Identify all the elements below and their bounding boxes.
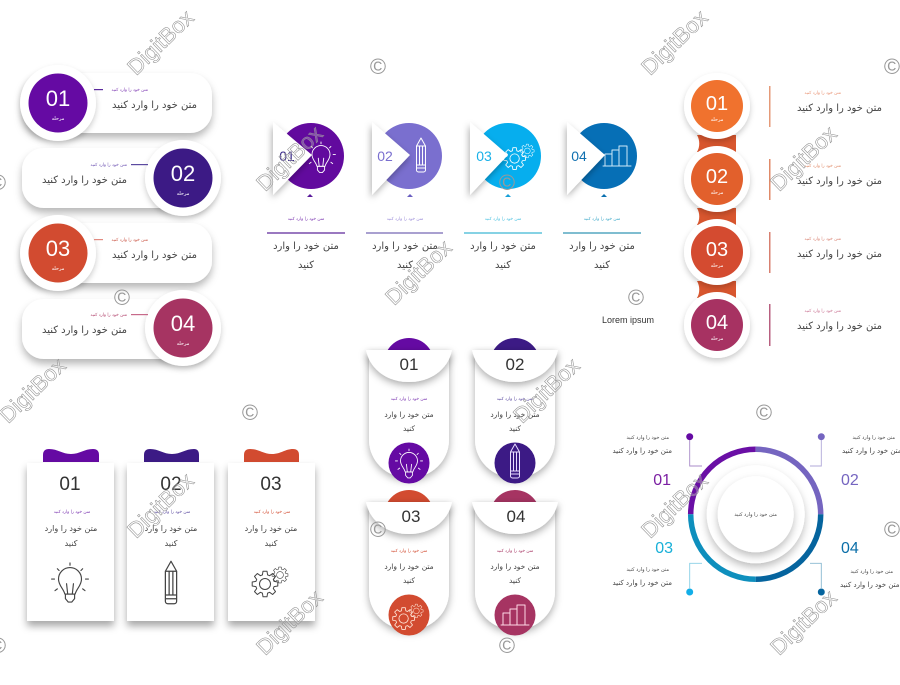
- panel: right vertical timeline: [684, 73, 882, 358]
- panel: left stacked pills: [20, 65, 221, 366]
- shield card 01: [366, 338, 452, 484]
- tab card 02: [127, 449, 214, 621]
- arrow step 02: کنید: [397, 260, 413, 271]
- step 01 pill: مرحله: [52, 116, 65, 122]
- watermarks: DigitBox: [122, 468, 198, 543]
- tab card 02: متن خود را وارد کنید: [154, 509, 190, 515]
- shield card 02: 02: [506, 355, 524, 374]
- callout 02: متن خود را وارد کنید: [852, 435, 895, 441]
- watermarks: ©: [114, 285, 130, 310]
- arrow step 01: متن خود را وارد: [273, 241, 339, 252]
- step 01 pill: متن خود را وارد کنید: [112, 100, 197, 111]
- shield card 03: متن خود را وارد کنید: [391, 548, 427, 554]
- arrow step 03: [464, 122, 542, 271]
- watermarks: DigitBox: [636, 468, 712, 543]
- shield card 01: کنید: [403, 424, 415, 433]
- shield card 03: کنید: [403, 576, 415, 585]
- timeline step 01: [684, 73, 882, 139]
- watermarks: ©: [756, 400, 772, 425]
- timeline step 02: متن خود را وارد کنید: [804, 163, 841, 169]
- panel: circular ring diagram: [612, 433, 900, 596]
- shield card 01: متن خود را وارد کنید: [391, 396, 427, 402]
- arrow step 03: 03: [476, 148, 492, 164]
- callout 03: متن خود را وارد کنید: [612, 579, 672, 587]
- timeline step 03: متن خود را وارد کنید: [804, 236, 841, 242]
- step 02 pill: [22, 140, 221, 216]
- timeline step 02: [684, 146, 882, 212]
- tab card 01: متن خود را وارد: [45, 524, 97, 533]
- watermarks: ©: [499, 170, 515, 195]
- shield card 04: متن خود را وارد کنید: [497, 548, 533, 554]
- arrow step 04: کنید: [594, 260, 610, 271]
- watermarks: ©: [370, 517, 386, 542]
- watermarks: DigitBox: [765, 121, 841, 196]
- shield card 03: 03: [402, 507, 420, 526]
- panel: shield cards grid: [366, 338, 558, 636]
- watermarks: DigitBox: [122, 5, 198, 80]
- watermarks: ©: [884, 54, 900, 79]
- tab card 03: [228, 449, 315, 621]
- step 02 pill: متن خود را وارد کنید: [90, 162, 127, 168]
- shield card 04: [472, 490, 558, 636]
- tab card 03: متن خود را وارد کنید: [254, 509, 290, 515]
- callout 04: 04: [841, 540, 859, 557]
- step 03 pill: [20, 215, 212, 291]
- timeline step 04: 04: [706, 312, 728, 334]
- step 02 pill: مرحله: [177, 191, 190, 197]
- arrow step 03: کنید: [495, 260, 511, 271]
- shield card 04: متن خود را وارد: [490, 562, 540, 571]
- shield card 01: متن خود را وارد: [384, 410, 434, 419]
- centre discs: [707, 465, 805, 563]
- arrow step 04: متن خود را وارد: [569, 241, 635, 252]
- timeline step 04: [684, 292, 882, 358]
- callout 01: 01: [653, 472, 671, 489]
- callout 01: [612, 433, 702, 489]
- timeline step 03: متن خود را وارد کنید: [797, 249, 882, 260]
- timeline step 04: متن خود را وارد کنید: [804, 308, 841, 314]
- timeline step 04: متن خود را وارد کنید: [797, 321, 882, 332]
- tab card 02: 02: [160, 474, 182, 495]
- tab card 03: کنید: [265, 539, 278, 548]
- arrow step 04: متن خود را وارد کنید: [584, 216, 620, 222]
- ring segments: [691, 449, 821, 579]
- shield card 02: متن خود را وارد: [490, 410, 540, 419]
- step 04 pill: متن خود را وارد کنید: [42, 325, 127, 336]
- timeline step 02: 02: [706, 166, 728, 188]
- panel: bottom-left tabbed cards: [27, 449, 315, 621]
- step 04 pill: 04: [171, 311, 195, 336]
- arrow step 01: کنید: [298, 260, 314, 271]
- tab card 02: متن خود را وارد: [145, 524, 197, 533]
- arrow step 02: 02: [377, 148, 393, 164]
- tab card 01: کنید: [65, 539, 78, 548]
- watermarks: ©: [628, 285, 644, 310]
- shield card 03: متن خود را وارد: [384, 562, 434, 571]
- shield card 03: [366, 490, 452, 636]
- tab card 03: متن خود را وارد: [245, 524, 297, 533]
- watermarks: DigitBox: [251, 121, 327, 196]
- arrow step 01: متن خود را وارد کنید: [288, 216, 324, 222]
- step 04 pill: مرحله: [177, 341, 190, 347]
- shield card 04: کنید: [509, 576, 521, 585]
- watermarks: ©: [242, 400, 258, 425]
- shield card 04: 04: [507, 507, 525, 526]
- panel: arrow circles row: [267, 122, 654, 325]
- callout 03: متن خود را وارد کنید: [626, 567, 669, 573]
- arrow step 03: متن خود را وارد: [470, 241, 536, 252]
- tab card 01: 01: [59, 474, 81, 495]
- callout 04: متن خود را وارد کنید: [850, 569, 893, 575]
- timeline step 04: مرحله: [711, 336, 724, 342]
- step 02 pill: 02: [171, 161, 195, 186]
- watermarks: DigitBox: [251, 585, 327, 660]
- arrow step 02: متن خود را وارد کنید: [387, 216, 423, 222]
- watermarks: ©: [884, 517, 900, 542]
- shield card 02: [472, 338, 558, 484]
- timeline step 02: مرحله: [711, 190, 724, 196]
- arrow step 04: [563, 122, 641, 271]
- shield card 01: 01: [400, 355, 418, 374]
- tab card 01: متن خود را وارد کنید: [54, 509, 90, 515]
- step 01 pill: متن خود را وارد کنید: [111, 87, 148, 93]
- arrow step 02: [366, 122, 443, 271]
- watermarks: DigitBox: [508, 353, 584, 428]
- caption: lorem ipsum: Lorem ipsum: [602, 315, 654, 325]
- shield card 02: کنید: [509, 424, 521, 433]
- timeline step 02: متن خود را وارد کنید: [797, 176, 882, 187]
- callout 01: متن خود را وارد کنید: [612, 447, 672, 455]
- callout 03: 03: [655, 540, 673, 557]
- step 03 pill: متن خود را وارد کنید: [112, 250, 197, 261]
- arrow step 01: [267, 122, 345, 271]
- step 02 pill: متن خود را وارد کنید: [42, 175, 127, 186]
- tab card 02: کنید: [165, 539, 178, 548]
- step 03 pill: 03: [46, 236, 70, 261]
- step 03 pill: متن خود را وارد کنید: [111, 237, 148, 243]
- arrow step 03: متن خود را وارد کنید: [485, 216, 521, 222]
- callout 01: متن خود را وارد کنید: [626, 435, 669, 441]
- step 01 pill: 01: [46, 86, 70, 111]
- shield card 02: متن خود را وارد کنید: [497, 396, 533, 402]
- timeline step 03: [684, 219, 882, 285]
- step 04 pill: [22, 290, 221, 366]
- timeline step 01: متن خود را وارد کنید: [797, 103, 882, 114]
- arrow step 01: 01: [279, 148, 295, 164]
- watermarks: ©: [370, 54, 386, 79]
- watermarks: DigitBox: [765, 585, 841, 660]
- arrow step 04: 04: [571, 148, 587, 164]
- tab card 03: 03: [260, 474, 282, 495]
- callout 03: [612, 540, 702, 596]
- step 04 pill: متن خود را وارد کنید: [90, 312, 127, 318]
- arrow step 02: متن خود را وارد: [372, 241, 438, 252]
- watermarks: DigitBox: [636, 5, 712, 80]
- callout 02: متن خود را وارد کنید: [842, 447, 900, 455]
- tab card 01: [27, 449, 114, 621]
- timeline step 03: 03: [706, 239, 728, 261]
- centre discs: متن خود را وارد کنید: [734, 512, 777, 518]
- timeline step 01: مرحله: [711, 117, 724, 123]
- step 01 pill: [20, 65, 212, 141]
- timeline step 01: 01: [706, 93, 728, 115]
- callout 02: 02: [841, 472, 859, 489]
- watermarks: DigitBox: [380, 235, 456, 310]
- callout 04: [810, 540, 900, 596]
- step 03 pill: مرحله: [52, 266, 65, 272]
- callout 02: [810, 433, 900, 489]
- timeline step 03: مرحله: [711, 263, 724, 269]
- callout 04: متن خود را وارد کنید: [840, 581, 900, 589]
- timeline step 01: متن خود را وارد کنید: [804, 90, 841, 96]
- watermarks: ©: [499, 633, 515, 658]
- connectors between circles: [697, 135, 736, 298]
